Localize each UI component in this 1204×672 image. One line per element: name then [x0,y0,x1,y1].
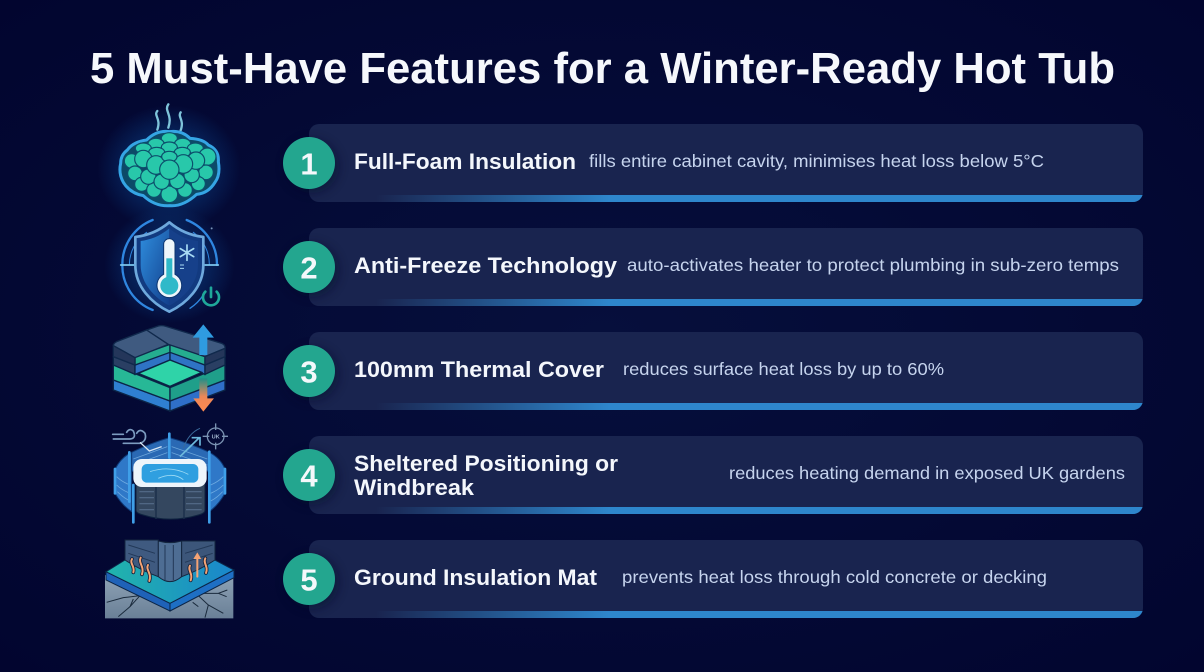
heading 5: Ground Insulation Mat [354,565,598,590]
accent bar 1 [309,195,1143,202]
heading 4: Sheltered Positioning or [354,451,618,476]
row 3: thermal cover [283,332,1143,410]
description 3: reduces surface heat loss by up to 60% [623,359,944,379]
icon: sheltered tub with windbreak [113,423,228,522]
card 5 [309,540,1143,618]
title: 5 Must-Have Features for a Winter-Ready Hot Tub [90,45,1115,93]
infographic canvas [91,52,1143,618]
number badge 4: 4 [300,458,318,494]
description 5: prevents heat loss through cold concrete or decking [622,567,1047,587]
accent bar 4 [309,507,1143,514]
description 4: reduces heating demand in exposed UK gardens [729,463,1125,483]
number badge 4 [283,449,335,501]
description 2: auto-activates heater to protect plumbing in sub-zero temps [627,255,1119,275]
number badge 1 [283,137,335,189]
heading 1: Full-Foam Insulation [354,149,576,174]
accent bar 2 [309,299,1143,306]
row 1: full-foam insulation [283,124,1143,202]
row 2: anti-freeze technology [283,228,1143,306]
heading 3: 100mm Thermal Cover [354,357,604,382]
description 1: fills entire cabinet cavity, minimises heat loss below 5°C [589,151,1044,171]
number badge 1: 1 [300,146,318,182]
heading 4 [354,451,618,500]
number badge 3: 3 [300,354,318,390]
heading 2: Anti-Freeze Technology [354,253,618,278]
card 1 [309,124,1143,202]
number badge 2 [283,241,335,293]
row 4: sheltered positioning [283,436,1143,514]
accent bar 3 [309,403,1143,410]
icon: ground insulation mat [105,540,234,618]
number badge 5 [283,553,335,605]
heading 4: Windbreak [354,475,474,500]
card 4 [309,436,1143,514]
icon: thermal cover layers [113,324,225,412]
accent bar 5 [309,611,1143,618]
icon: foam block with steam [97,104,241,232]
icon: sheltered tub with windbreak: UK [212,434,221,440]
card 3 [309,332,1143,410]
icon: anti-freeze shield [104,207,234,323]
number badge 5: 5 [300,562,318,598]
number badge 3 [283,345,335,397]
number badge 2: 2 [300,250,318,286]
card 2 [309,228,1143,306]
row 5: ground insulation mat [283,540,1143,618]
